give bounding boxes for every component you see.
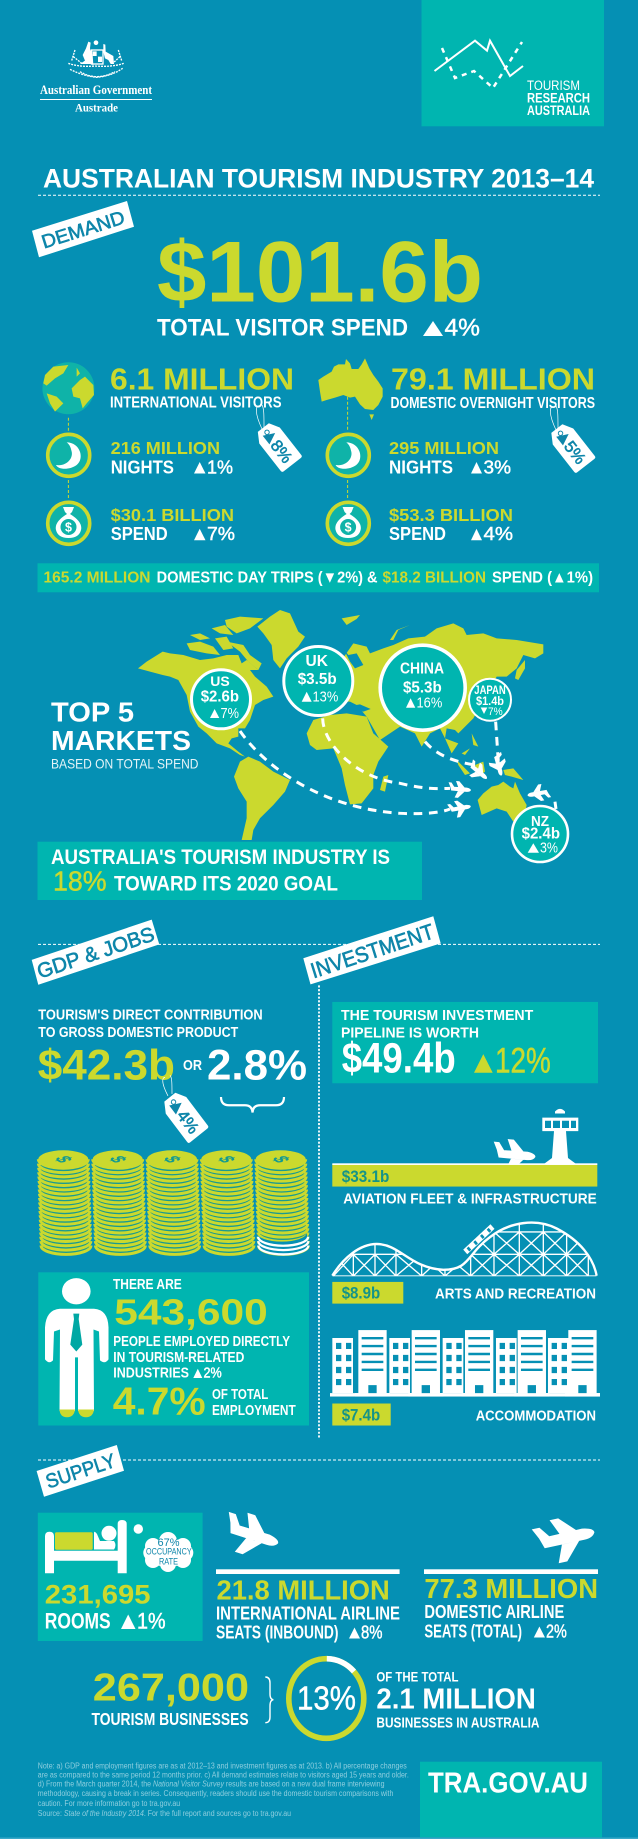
footnote: d) From the March quarter 2014, the National Visitor Survey results are based on a new dual frame interviewing	[38, 1780, 385, 1789]
icon: Australia map	[318, 358, 383, 420]
heading: top 5 markets	[51, 697, 198, 771]
footnote: methodology, causing a break in series. Consequently, readers should use the domestic tourism comparisons with	[38, 1789, 393, 1798]
price tag: down 5%	[547, 406, 596, 474]
text: industries up 2%: INDUSTRIES	[113, 1365, 189, 1382]
market: US: 7%	[220, 705, 239, 722]
change: up 3%: 3%	[484, 456, 511, 477]
section tag: Demand	[32, 201, 134, 257]
icon: coat of arms	[68, 40, 124, 77]
text: of total: OF TOTAL	[212, 1387, 269, 1403]
coin stack 1: $	[50, 1154, 78, 1164]
coin stack 2: $	[104, 1154, 133, 1164]
coin stack 2	[93, 1150, 145, 1254]
price tag: down 4%: 4%	[173, 1106, 203, 1138]
icon: money bag	[327, 502, 369, 544]
label: toward 2020 goal: TOWARD ITS 2020 GOAL	[114, 873, 338, 896]
subheading: based on total spend: BASED ON TOTAL SPEND	[51, 755, 198, 771]
label: total visitor spend: TOTAL VISITOR SPEND	[157, 315, 408, 342]
icons: planes on map	[447, 751, 552, 819]
icon: money bag: $	[345, 520, 352, 534]
logo text: Australia: AUSTRALIA	[527, 103, 590, 118]
label: domestic airline: DOMESTIC AIRLINE	[424, 1602, 564, 1622]
change: up 12%: 12%	[495, 1042, 551, 1081]
panel: investment pipeline	[332, 1002, 598, 1083]
value: $8.9b: $8.9b	[342, 1284, 380, 1303]
section: GDP, jobs and investment	[32, 916, 600, 1439]
market: UK	[284, 646, 353, 716]
change: up 4%: 4%	[484, 523, 513, 544]
bracket	[221, 1097, 284, 1112]
label: spend: SPEND	[111, 523, 168, 544]
coin stack 5	[256, 1150, 308, 1254]
logo text: Australian Government: Australian Government	[40, 83, 153, 97]
callout: occupancy rate: RATE	[159, 1556, 178, 1567]
stat: 77.3 million: 77.3 MILLION	[424, 1573, 598, 1604]
stat: 4.7%: 4.7%	[113, 1380, 206, 1424]
text: industries up 2%: 2%	[204, 1365, 222, 1382]
market: Japan: JAPAN	[474, 685, 506, 697]
market: NZ: 3%	[540, 840, 558, 857]
label: seats total: SEATS (TOTAL)	[424, 1621, 522, 1641]
chart: aviation investment	[332, 1109, 597, 1208]
icon: roller coaster	[332, 1220, 597, 1276]
panel: investment pipeline: THE TOURISM INVESTMENT	[341, 1008, 533, 1024]
change: up 4%	[471, 523, 513, 544]
market: NZ: NZ	[531, 813, 549, 830]
stat: 6.1 million: 6.1 MILLION	[110, 361, 294, 396]
stat: 165.2 million: 165.2 MILLION	[44, 570, 150, 587]
footnote	[38, 1761, 409, 1818]
market: Japan: 7%	[488, 706, 503, 718]
chart: 13% ring	[289, 1659, 364, 1738]
panel: tourism businesses	[92, 1659, 540, 1738]
panel: Tourism Research Australia logo	[422, 0, 604, 126]
chart: 13% ring: 13%	[297, 1679, 356, 1716]
change: up 3%	[471, 456, 511, 477]
label: aviation: AVIATION FLEET & INFRASTRUCTURE	[343, 1192, 597, 1208]
price tag: down 8%: 8%	[267, 437, 296, 467]
change: up 2%: 2%	[546, 1621, 567, 1641]
icon: plane	[491, 1138, 537, 1174]
title: AUSTRALIAN TOURISM INDUSTRY 2013–14	[43, 164, 594, 194]
section tag: GDP & Jobs: GDP & JOBS	[35, 923, 157, 984]
market: China: CHINA	[400, 660, 444, 677]
text: or: OR	[183, 1058, 202, 1074]
change: up 1%	[121, 1609, 166, 1634]
market: US: US	[210, 673, 230, 689]
world map	[138, 610, 543, 840]
text: people employed: PEOPLE EMPLOYED DIRECTLY	[113, 1334, 290, 1350]
coin stack 4: $	[213, 1154, 241, 1164]
heading: top 5 markets: MARKETS	[51, 725, 191, 756]
stat: $30.1 billion spend: $30.1 BILLION	[111, 505, 234, 525]
text: employment: EMPLOYMENT	[212, 1403, 296, 1419]
panel: domestic airline seats	[424, 1512, 599, 1641]
heading: top 5 markets: TOP 5	[51, 697, 134, 728]
market: US	[192, 670, 250, 729]
label: domestic day trips: DOMESTIC DAY TRIPS (▼2%) &	[157, 570, 378, 587]
callout: occupancy rate: OCCUPANCY	[146, 1546, 192, 1557]
icon: bed	[45, 1520, 127, 1573]
market: UK: UK	[306, 653, 329, 670]
market: China: 16%	[416, 695, 442, 712]
section tag: Investment: INVESTMENT	[308, 919, 437, 983]
panel: domestic day trips bar	[38, 563, 599, 592]
label: nights: NIGHTS	[111, 456, 174, 477]
stat: 543,600: 543,600	[114, 1292, 268, 1332]
logo: Australian Government Austrade	[40, 40, 153, 115]
panel: 2020 goal: AUSTRALIA'S TOURISM INDUSTRY IS	[51, 846, 390, 869]
coin stack 5: $	[267, 1154, 296, 1164]
footnote: are as compared to the same period 12 months prior. c) All demand estimates relate to visitors aged 15 years and older.	[38, 1770, 409, 1779]
change: up 2%	[534, 1621, 567, 1641]
text: businesses in Australia: BUSINESSES IN AUSTRALIA	[376, 1714, 540, 1731]
chart: accommodation investment	[330, 1330, 600, 1426]
price tag: down 8%	[253, 405, 303, 473]
market: NZ: $2.4b	[522, 826, 560, 843]
stat: $53.3 billion spend: $53.3 BILLION	[389, 505, 513, 525]
label: international airline: INTERNATIONAL AIRLINE	[216, 1603, 400, 1623]
label: accommodation: ACCOMMODATION	[476, 1408, 596, 1425]
market: Japan: $1.4b	[476, 694, 504, 708]
section tag: Demand: DEMAND	[39, 208, 128, 253]
change: up 1%: 1%	[207, 456, 233, 477]
flight routes	[240, 718, 556, 814]
stat: 2.1 million: 2.1 MILLION	[376, 1683, 536, 1715]
label: spend: SPEND (▲1%)	[492, 570, 593, 587]
stat: 295 million nights: 295 MILLION	[389, 438, 499, 458]
market: UK: $3.5b	[298, 671, 337, 688]
change: up 8%: 8%	[361, 1622, 382, 1642]
coin stack 4	[201, 1150, 254, 1254]
stat: $42.3b: $42.3b	[38, 1041, 175, 1089]
change: up 8%	[349, 1622, 382, 1642]
market: Japan	[469, 679, 511, 721]
panel: domestic overnight visitors	[318, 358, 596, 544]
icon: person in tie	[45, 1278, 108, 1417]
callout: occupancy rate: 67%	[157, 1537, 180, 1549]
change: up 1%: 1%	[137, 1609, 166, 1634]
label: seats inbound: SEATS (INBOUND)	[216, 1622, 338, 1642]
label: spend: SPEND	[389, 523, 446, 544]
icon: chart lines	[434, 41, 523, 88]
text: tourism's direct contribution: TOURISM'S DIRECT CONTRIBUTION	[38, 1007, 263, 1024]
change: up 4%: 4%	[444, 315, 480, 342]
logo text: Tourism: TOURISM	[527, 78, 580, 93]
footnote: Source: State of the Industry 2014. For the full report and sources go to tra.gov.au	[38, 1809, 291, 1818]
panel: 2020 goal	[38, 842, 422, 900]
panel: website: TRA.GOV.AU	[428, 1767, 588, 1799]
callout: occupancy rate	[134, 1524, 193, 1572]
panel: rooms	[38, 1513, 203, 1641]
stat: 21.8 million: 21.8 MILLION	[216, 1574, 390, 1605]
coin stack 3: $	[158, 1154, 187, 1164]
icon: hotel skyline	[330, 1330, 600, 1397]
market: UK: 13%	[312, 689, 338, 706]
icon: moon	[48, 434, 90, 476]
text: gross domestic product: TO GROSS DOMESTIC PRODUCT	[38, 1025, 238, 1041]
icon: money bag: $	[65, 520, 72, 534]
stat: $49.4b: $49.4b	[342, 1034, 456, 1082]
text: pipeline is worth: PIPELINE IS WORTH	[341, 1025, 479, 1041]
panel: international visitors	[42, 361, 303, 544]
icon: globe	[42, 362, 94, 414]
chart: coin stacks	[38, 1150, 308, 1254]
stat: 231,695: 231,695	[45, 1579, 150, 1609]
section tag: Supply: SUPPLY	[43, 1450, 118, 1493]
stat: 216 million nights: 216 MILLION	[111, 438, 220, 458]
market: China	[380, 645, 465, 730]
icon: money bag	[48, 502, 90, 544]
text: of the total: OF THE TOTAL	[376, 1669, 459, 1685]
text: tourism-related: IN TOURISM-RELATED	[113, 1350, 244, 1366]
footnote: Note: a) GDP and employment figures are as at 2012–13 and investment figures as at 2013. b) All percentage changes	[38, 1761, 407, 1770]
change: up 12%	[474, 1042, 551, 1081]
label: rooms: ROOMS	[45, 1609, 111, 1634]
label: international visitors: INTERNATIONAL VISITORS	[110, 394, 282, 411]
price tag: down 4%	[160, 1075, 209, 1144]
stat: 79.1 million: 79.1 MILLION	[391, 361, 595, 396]
panel: international airline seats	[216, 1507, 400, 1642]
coin stack 1	[38, 1150, 91, 1254]
stat: 267,000: 267,000	[93, 1667, 249, 1710]
label: tourism businesses: TOURISM BUSINESSES	[92, 1709, 249, 1729]
value: $33.1b: $33.1b	[342, 1168, 389, 1186]
footnote: caution. For more information go to tra.gov.au	[38, 1799, 180, 1808]
bracket	[265, 1677, 273, 1723]
change: up 1%	[194, 456, 233, 477]
change: up 7%: 7%	[207, 523, 235, 544]
stat: $18.2 billion: $18.2 BILLION	[382, 570, 486, 587]
logo text: Austrade: Austrade	[75, 103, 118, 115]
logo text: Research: RESEARCH	[527, 91, 590, 106]
icon: moon	[327, 434, 369, 476]
change: up 7%	[194, 523, 235, 544]
panel: employment	[38, 1272, 309, 1426]
price tag: down 5%: 5%	[560, 438, 589, 468]
icon: plane	[218, 1507, 284, 1564]
market: NZ	[512, 806, 568, 862]
change: up 4%	[423, 315, 480, 342]
coin stack 3	[147, 1150, 200, 1254]
panel: website	[420, 1762, 602, 1837]
chart: arts and recreation investment	[332, 1220, 597, 1304]
market: China: $5.3b	[403, 679, 442, 696]
value: $7.4b: $7.4b	[342, 1406, 380, 1425]
icon: plane	[531, 1512, 599, 1567]
icon: control tower	[542, 1109, 578, 1164]
label: nights: NIGHTS	[389, 456, 453, 477]
stat: 18%: 18%	[53, 866, 107, 897]
headline: total visitor spend: $101.6b	[157, 225, 483, 321]
label: arts and recreation: ARTS AND RECREATION	[435, 1286, 596, 1303]
panel: GDP contribution	[38, 1007, 307, 1144]
text: there are: THERE ARE	[113, 1277, 182, 1293]
stat: 2.8%: 2.8%	[207, 1041, 307, 1089]
market: US: $2.6b	[201, 689, 239, 706]
